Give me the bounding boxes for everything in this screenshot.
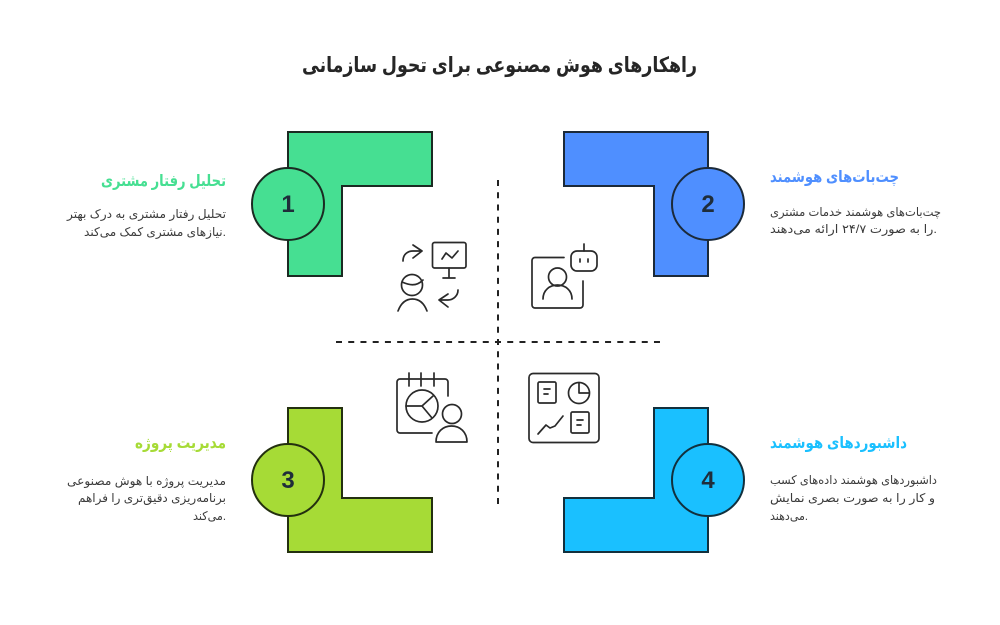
number badge 3	[252, 444, 324, 516]
heading 4: داشبوردهای هوشمند	[770, 435, 907, 452]
description 1: نیازهای مشتری کمک می‌کند.	[84, 225, 226, 240]
L-shape 4	[564, 408, 708, 552]
panel: customer behaviour analysis	[66, 132, 432, 276]
number badge 2	[672, 168, 744, 240]
description 4: می‌دهند.	[770, 509, 808, 523]
panel: project management	[67, 408, 432, 552]
number badge 4	[672, 444, 744, 516]
vertical dashed divider	[497, 180, 499, 504]
description 3	[67, 474, 226, 523]
description 2: را به صورت ۲۴/۷ ارائه می‌دهند.	[770, 222, 937, 237]
heading 1: تحلیل رفتار مشتری	[101, 173, 226, 190]
L-shape 3	[288, 408, 432, 552]
description 4: و کار را به صورت بصری نمایش	[770, 491, 935, 506]
heading 3: مدیریت پروژه	[135, 435, 226, 453]
L-shape 2	[564, 132, 708, 276]
number badge 1: 1	[281, 191, 295, 218]
description 4: داشبوردهای هوشمند داده‌های کسب	[770, 473, 937, 488]
icon: chatbot	[532, 244, 597, 308]
icon: dashboard	[529, 374, 599, 442]
number badge 3: 3	[281, 467, 295, 494]
description 2: چت‌بات‌های هوشمند خدمات مشتری	[770, 205, 941, 220]
heading 2: چت‌بات‌های هوشمند	[770, 169, 899, 187]
description 3: مدیریت پروژه با هوش مصنوعی	[67, 474, 226, 489]
number badge 4: 4	[701, 467, 715, 494]
number badge 1	[252, 168, 324, 240]
description 1: تحلیل رفتار مشتری به درک بهتر	[66, 207, 226, 222]
description 4	[770, 473, 937, 523]
number badge 2: 2	[701, 191, 715, 218]
icon: project calendar	[397, 373, 467, 442]
description 3: می‌کند.	[193, 509, 226, 523]
panel: smart dashboards	[564, 408, 937, 552]
panel: smart chatbots	[564, 132, 941, 276]
description 2	[770, 205, 941, 237]
description 3: برنامه‌ریزی دقیق‌تری را فراهم	[78, 491, 226, 506]
horizontal dashed divider	[336, 341, 660, 343]
description 1	[66, 207, 226, 240]
title: راهکارهای هوش مصنوعی برای تحول سازمانی	[302, 54, 697, 77]
L-shape 1	[288, 132, 432, 276]
icon: customer analysis	[398, 242, 466, 311]
